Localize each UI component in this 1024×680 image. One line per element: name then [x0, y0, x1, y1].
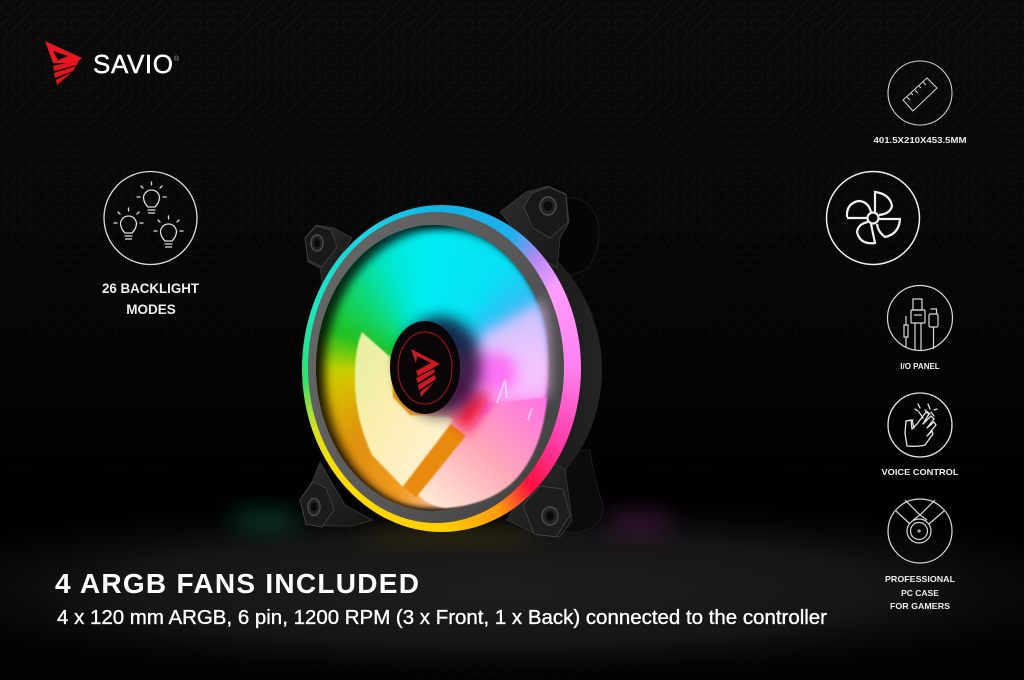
- icon: ruler: [888, 61, 952, 125]
- logo: [45, 41, 180, 85]
- feature: PC case: [885, 498, 955, 611]
- label: I/O PANEL: [900, 362, 940, 371]
- feature: dimensions: [874, 60, 967, 145]
- wordmark: SAVIO: [93, 49, 173, 79]
- feature: backlight modes: [102, 170, 200, 317]
- icon: fan: [826, 170, 920, 266]
- label: PROFESSIONAL: [885, 574, 955, 584]
- feature: PC case: FOR GAMERS: [890, 601, 950, 611]
- icon: three light bulbs: [104, 172, 197, 264]
- label: VOICE CONTROL: [882, 467, 958, 477]
- icon: clapping hands: [888, 393, 952, 457]
- heading: 4 ARGB FANS INCLUDED: [55, 568, 419, 599]
- fan grey bezel: [308, 212, 564, 523]
- label: 26 BACKLIGHT: [102, 281, 200, 296]
- feature: voice control: [882, 392, 958, 477]
- fan coloured blade field: [316, 225, 551, 511]
- label: 401.5X210X453.5MM: [874, 136, 967, 145]
- feature: backlight modes: MODES: [126, 302, 176, 317]
- icon: case fan badge: [888, 499, 952, 563]
- fan RGB outer rim: [302, 205, 581, 532]
- feature: IO panel: [886, 284, 954, 371]
- icon: Savio red arrow: [45, 41, 82, 85]
- icon: cables: [888, 286, 952, 350]
- feature: PC case: PC CASE: [901, 588, 939, 598]
- registered mark: ®: [174, 55, 180, 63]
- fan hub: [390, 321, 460, 414]
- spec text: 4 x 120 mm ARGB, 6 pin, 1200 RPM (3 x Front, 1 x Back) connected to the controller: [57, 607, 827, 629]
